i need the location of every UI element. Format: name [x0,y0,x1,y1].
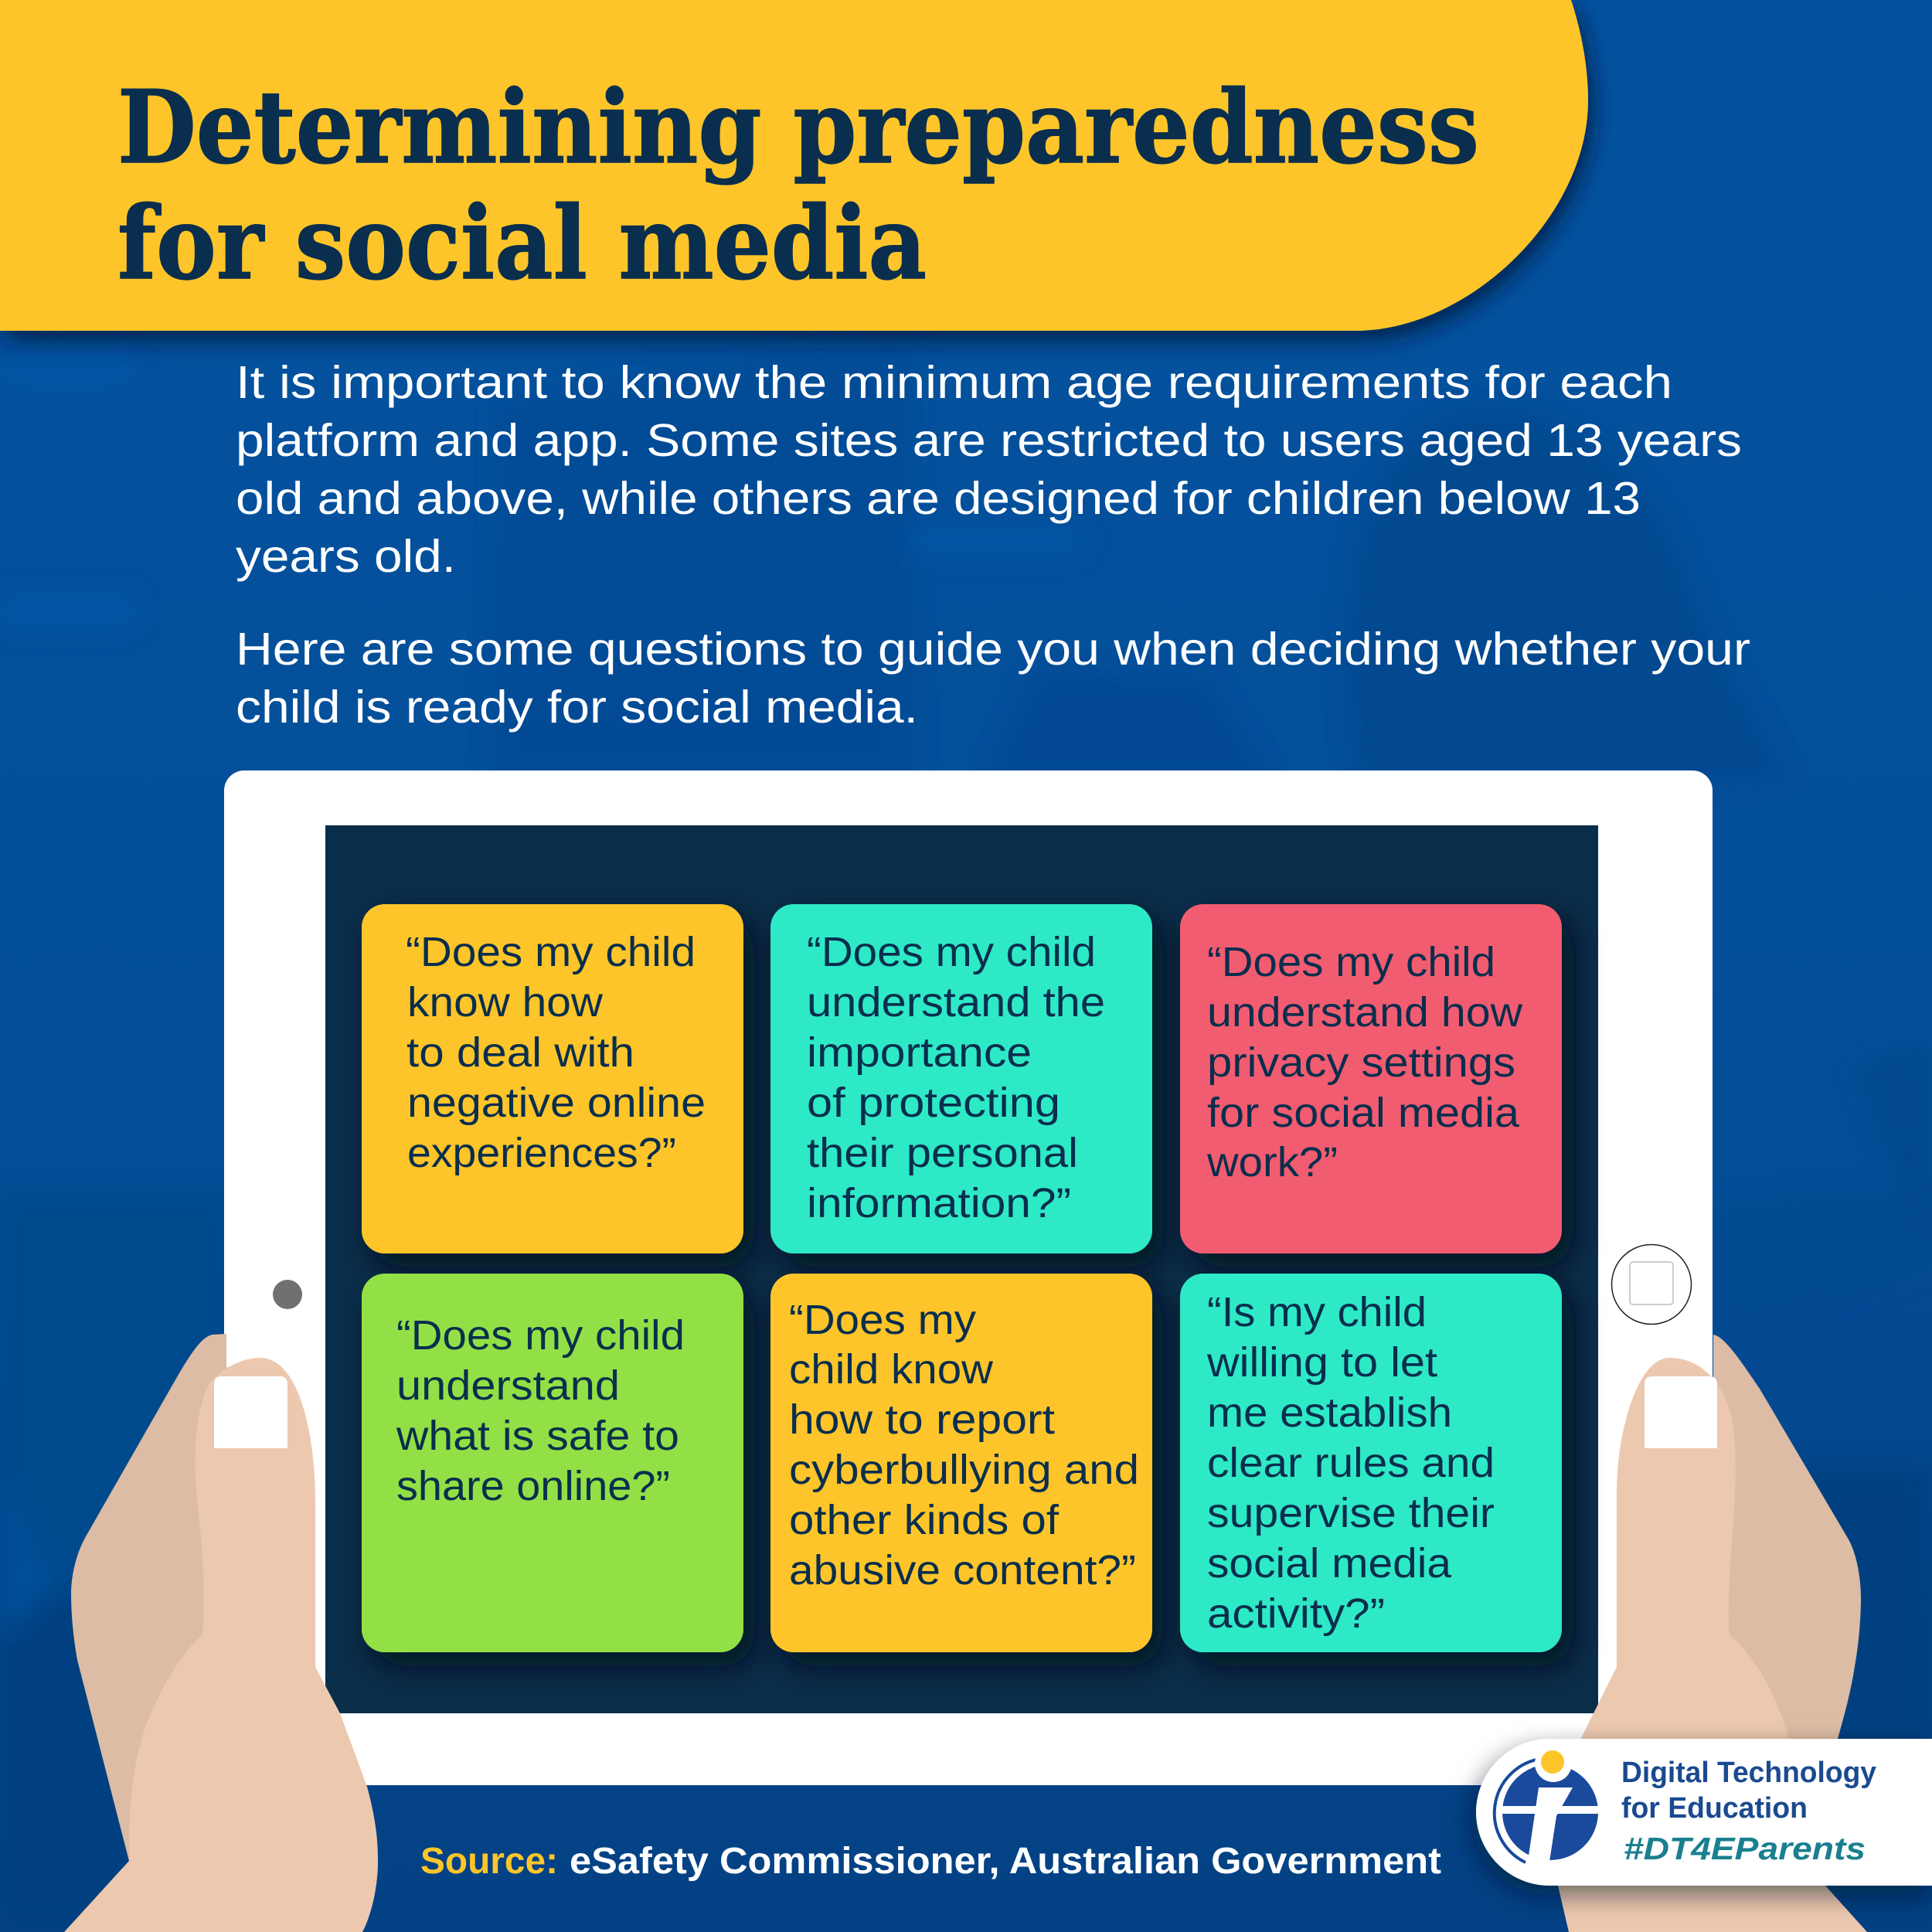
card: safe to share: understand [396,1362,620,1409]
card: safe to share [362,1274,743,1652]
card: personal information: “Does my child [807,929,1096,975]
left hand [64,1334,378,1932]
intro text [236,357,1750,733]
intro text: platform and app. Some sites are restricted to users aged 13 years [236,415,1742,466]
card: privacy settings: work?” [1206,1139,1338,1185]
card: negative experiences [362,904,743,1253]
card: report cyberbullying: child know [789,1346,994,1393]
card: clear rules: supervise their [1207,1490,1495,1536]
right hand [1558,1335,1867,1932]
card: personal information: importance [807,1029,1032,1076]
intro text: old and above, while others are designed for children below 13 [236,473,1641,524]
tablet [224,770,1713,1785]
logo band [1476,1739,1932,1886]
card: report cyberbullying: “Does my [789,1297,976,1343]
title: Determining preparedness [117,68,1479,186]
title [117,68,1479,302]
card: report cyberbullying: abusive content?” [789,1547,1136,1594]
card: clear rules: social media [1207,1540,1452,1587]
card: privacy settings: privacy settings [1207,1039,1515,1086]
logo wordmark: for Education [1621,1792,1808,1825]
logo mark [1495,1745,1601,1866]
card: personal information: understand the [807,979,1105,1026]
card: negative experiences: to deal with [406,1029,634,1076]
card: clear rules: willing to let [1206,1339,1437,1386]
card: clear rules: “Is my child [1207,1289,1427,1335]
card: negative experiences: “Does my child [406,929,696,975]
card: personal information [770,904,1152,1253]
intro text: Here are some questions to guide you when deciding whether your [236,624,1750,675]
logo wordmark: Digital Technology [1621,1757,1876,1789]
card: clear rules [1180,1274,1562,1652]
left thumbnail [214,1376,287,1448]
card: safe to share: share online?” [396,1463,670,1509]
card: safe to share: what is safe to [396,1413,679,1459]
intro text: It is important to know the minimum age requirements for each [236,357,1672,408]
card: privacy settings: understand how [1207,989,1523,1036]
logo wordmark [1621,1757,1876,1866]
card: negative experiences: negative online [407,1080,706,1126]
source line: eSafety Commissioner, Australian Government [570,1841,1441,1882]
header banner [0,0,1588,331]
card: clear rules: clear rules and [1207,1440,1495,1486]
card: personal information: of protecting [807,1080,1060,1126]
card: clear rules: me establish [1207,1389,1452,1436]
source line: Source: [420,1841,558,1882]
card: report cyberbullying: cyberbullying and [789,1447,1139,1493]
card: privacy settings: “Does my child [1207,939,1495,985]
card: personal information: information?” [807,1180,1071,1226]
card: negative experiences: experiences?” [407,1130,676,1176]
tablet camera dot [273,1280,302,1309]
tablet screen [325,825,1598,1713]
card: negative experiences: know how [407,979,604,1026]
card: clear rules: activity?” [1207,1590,1385,1637]
card: privacy settings [1180,904,1562,1253]
card: report cyberbullying [770,1274,1152,1652]
card: safe to share: “Does my child [396,1312,685,1359]
card: report cyberbullying: how to report [789,1396,1055,1443]
intro text: years old. [236,531,456,582]
card: personal information: their personal [807,1130,1078,1176]
card: privacy settings: for social media [1207,1090,1520,1136]
card: report cyberbullying: other kinds of [789,1497,1060,1543]
right thumbnail [1645,1376,1717,1448]
title: for social media [117,184,927,302]
tablet home button [1612,1244,1691,1325]
logo wordmark: #DT4EParents [1624,1831,1866,1866]
intro text: child is ready for social media. [236,682,918,733]
